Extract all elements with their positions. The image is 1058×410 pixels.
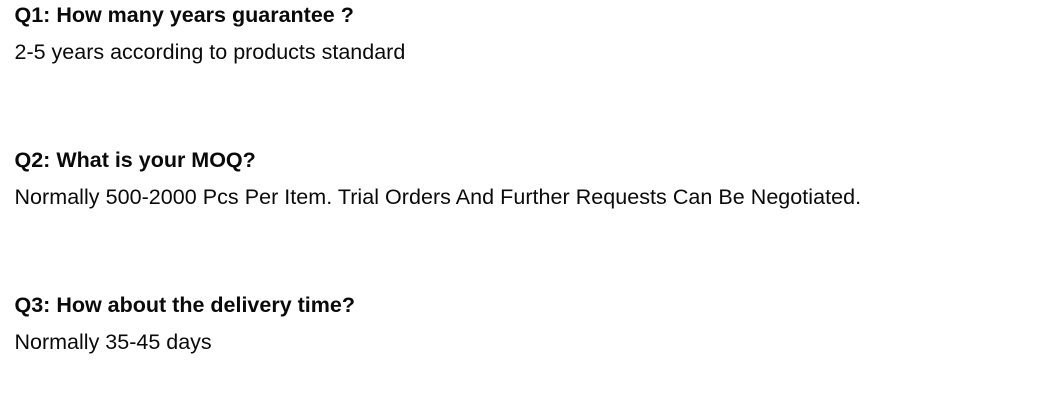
answer 2 text: Normally 500-2000 Pcs Per Item. Trial Orders And Further Requests Can Be Negotiated. <box>14 185 861 209</box>
question 2 heading: Q2: What is your MOQ? <box>14 148 256 172</box>
question 3 heading: Q3: How about the delivery time? <box>14 293 355 317</box>
answer 3 text: Normally 35-45 days <box>14 330 212 354</box>
question 1 heading: Q1: How many years guarantee ? <box>14 3 354 27</box>
answer 1 text: 2-5 years according to products standard <box>14 40 405 64</box>
